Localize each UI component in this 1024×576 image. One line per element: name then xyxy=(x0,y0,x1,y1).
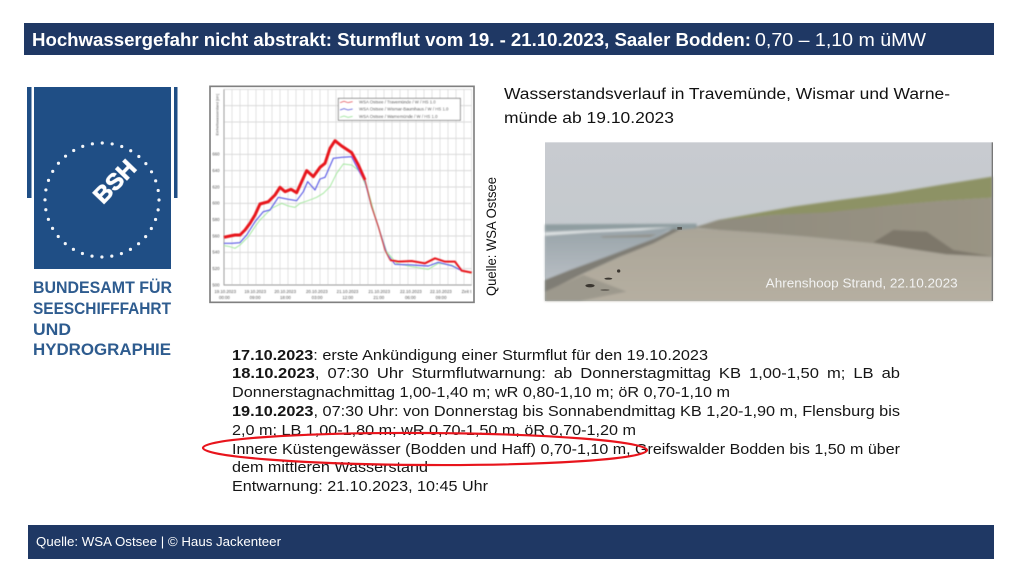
chart axis labels: 03:00 xyxy=(312,295,323,300)
chart axis labels: 21:00 xyxy=(373,295,385,300)
chart axis labels xyxy=(212,94,472,300)
chart caption xyxy=(504,86,950,127)
chart axis labels: 660 xyxy=(212,152,220,157)
logo wordmark: SEESCHIFFFAHRT xyxy=(33,300,171,318)
chart legend: WSA Ostsee / Travemünde / W / HS 1.0 xyxy=(359,99,436,104)
warning timeline text: Entwarnung: 21.10.2023, 10:45 Uhr xyxy=(232,479,488,495)
chart axis labels: 520 xyxy=(212,266,220,271)
chart axis labels: 540 xyxy=(212,250,220,255)
highlight ellipse xyxy=(203,432,647,466)
chart legend xyxy=(338,98,460,120)
grid lines xyxy=(224,89,472,285)
chart axis labels: 18:00 xyxy=(280,295,291,300)
chart axis labels: 21.10.2023 xyxy=(368,289,391,294)
warning timeline text: dem mittleren Wasserstand xyxy=(232,460,428,476)
logo: BSH xyxy=(27,87,178,359)
chart axis labels: 560 xyxy=(212,233,220,238)
chart axis labels: 580 xyxy=(212,217,220,222)
logo wordmark: BUNDESAMT FÜR xyxy=(33,278,172,297)
chart axis labels: Zeit t xyxy=(462,289,472,294)
chart axis labels: 620 xyxy=(212,184,220,189)
chart axis labels: Einheitswasserstand [cm] xyxy=(215,94,219,135)
chart axis labels: 500 xyxy=(212,282,220,287)
warning timeline text: 17.10.2023 : erste Ankündigung einer Sturmflut für den 19.10.2023 xyxy=(232,348,708,364)
logo wordmark: HYDROGRAPHIE xyxy=(33,341,171,359)
chart axis labels: 09:00 xyxy=(250,295,261,300)
logo wordmark: UND xyxy=(33,321,71,339)
chart axis labels: 19.10.2023 xyxy=(244,289,267,294)
chart axis labels: 21.10.2023 xyxy=(337,289,359,294)
chart legend: WSA Ostsee / Warnemünde / W / HS 1.0 xyxy=(359,114,438,119)
logo: BSH: BSH xyxy=(88,154,141,208)
chart: water levels xyxy=(210,86,474,302)
chart caption: Wasserstandsverlauf in Travemünde, Wismar und Warne- xyxy=(504,86,950,103)
warning timeline text: Donnerstagnachmittag 1,00-1,40 m; wR 0,80-1,10 m; öR 0,70-1,10 m xyxy=(232,385,730,401)
warning timeline text: 19.10.2023 , 07:30 Uhr: von Donnerstag bis Sonnabendmittag KB 1,20-1,90 m, Flensburg bis xyxy=(232,404,900,420)
photo caption: Ahrenshoop Strand, 22.10.2023 xyxy=(766,276,958,291)
chart axis labels: 600 xyxy=(212,201,220,206)
chart axis labels: 640 xyxy=(212,168,220,173)
warning timeline text xyxy=(232,348,900,495)
chart series xyxy=(224,141,472,273)
chart caption: münde ab 19.10.2023 xyxy=(504,110,674,127)
chart axis labels: 09:00 xyxy=(436,295,447,300)
chart axis labels: 19.10.2023 xyxy=(214,289,237,294)
chart axis labels: 06:00 xyxy=(405,295,416,300)
chart axis labels: 12:00 xyxy=(342,295,354,300)
warning timeline text: 2,0 m; LB 1,00-1,80 m; wR 0,70-1,50 m, öR 0,70-1,20 m xyxy=(232,423,636,439)
photo: Ahrenshoop beach xyxy=(545,142,993,301)
chart axis labels: 20.10.2023 xyxy=(306,289,328,294)
warning timeline text: 18.10.2023 , 07:30 Uhr Sturmflutwarnung: ab Donnerstagmittag KB 1,00-1,50 m; LB ab xyxy=(232,366,900,382)
footer bar xyxy=(28,525,994,559)
title: Hochwassergefahr nicht abstrakt: Sturmflut vom 19. - 21.10.2023, Saaler Bodden: xyxy=(32,30,751,50)
chart legend: WSA Ostsee / Wismar-Baumhaus / W / HS 1.0 xyxy=(359,107,449,112)
chart axis labels: 00:00 xyxy=(219,295,230,300)
title value: 0,70 – 1,10 m üMW xyxy=(755,30,926,50)
logo wordmark xyxy=(33,278,172,359)
chart axis labels: 22.10.2023 xyxy=(430,289,452,294)
source note: chart: Quelle: WSA Ostsee xyxy=(484,177,499,296)
chart axis labels: 20.10.2023 xyxy=(274,289,297,294)
chart axis labels: 22.10.2023 xyxy=(400,289,422,294)
footer source: Quelle: WSA Ostsee | © Haus Jackenteer xyxy=(36,534,282,549)
header bar xyxy=(24,23,994,55)
warning timeline text: Innere Küstengewässer (Bodden und Haff) 0,70-1,10 m, Greifswalder Bodden bis 1,50 m über xyxy=(232,442,900,458)
